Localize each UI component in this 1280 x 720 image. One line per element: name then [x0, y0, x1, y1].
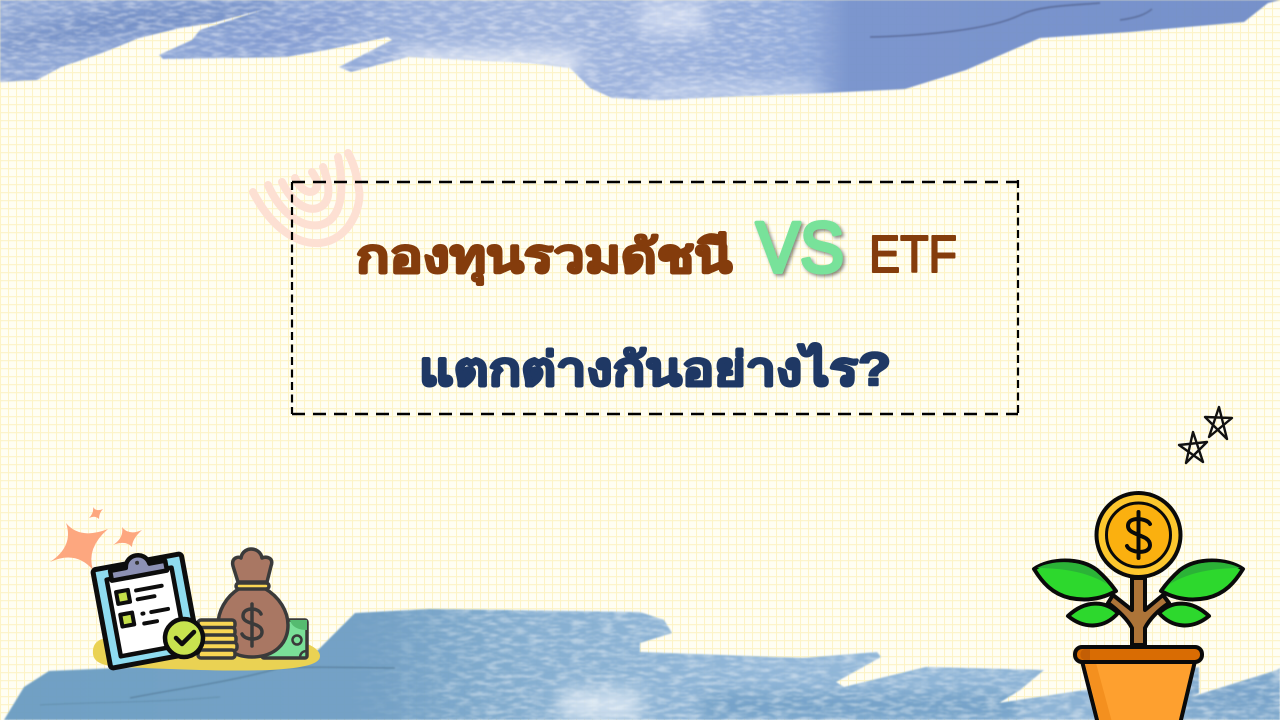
banknote: [262, 620, 307, 658]
small right leaf: [1159, 604, 1209, 625]
small left leaf: [1068, 604, 1118, 625]
icon: money plant: [1034, 493, 1243, 720]
clipboard: [91, 547, 199, 668]
dashed title frame: [292, 180, 1018, 416]
check badge: [165, 619, 203, 657]
watercolor band: bottom: [0, 600, 1280, 720]
title: ETF: ETF: [869, 226, 957, 284]
watercolor band: top: [0, 0, 1280, 110]
large left leaf: [1034, 560, 1116, 600]
dollar sign on bag: [242, 604, 262, 646]
icon: finance group: [91, 547, 320, 671]
title: index fund: กองทุนรวมดัชนี: [356, 230, 733, 285]
decorative concentric arcs: [253, 153, 359, 243]
title: VS: VS: [756, 209, 844, 288]
large right leaf: [1161, 560, 1243, 600]
title: second line: แตกต่างกันอย่างไร?: [419, 343, 891, 395]
coin stack: [198, 620, 237, 658]
icon: doodle stars: [1179, 407, 1232, 463]
icon: sparkles: [50, 507, 142, 570]
yellow blob: [93, 638, 320, 671]
plant stem: [1108, 578, 1169, 645]
title: [356, 209, 957, 395]
money bag: [218, 549, 288, 657]
pot: [1075, 647, 1202, 720]
coin: [1096, 493, 1180, 577]
